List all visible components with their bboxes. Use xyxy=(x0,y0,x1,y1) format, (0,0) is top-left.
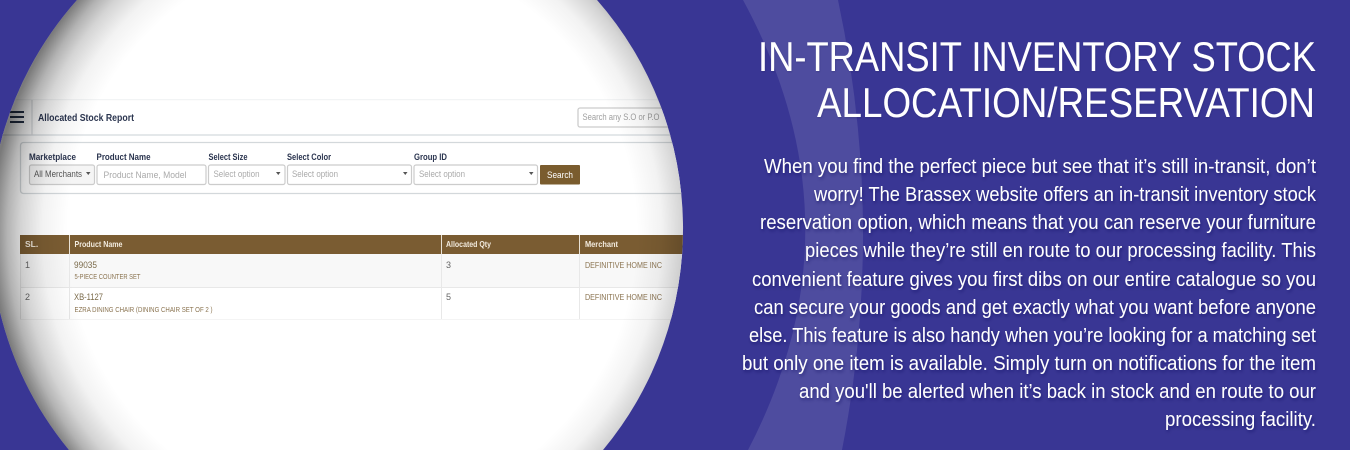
decorative crescent xyxy=(743,0,863,450)
table row 2 xyxy=(20,288,690,320)
field placeholders: Select option xyxy=(419,169,465,179)
field placeholders: Select option xyxy=(292,169,338,179)
table row 1: 5-PIECE COUNTER SET xyxy=(74,274,141,281)
filter labels: Group ID xyxy=(414,152,447,162)
body text: When you find the perfect piece but see that it’s still in-transit, don’t xyxy=(764,156,1316,178)
body text: and you'll be alerted when it’s back in stock and en route to our xyxy=(799,381,1316,403)
search box xyxy=(578,108,688,127)
table header: Merchant xyxy=(585,239,618,249)
icon: menu xyxy=(10,112,24,122)
field placeholders xyxy=(34,170,464,180)
filter panel xyxy=(20,142,700,194)
table row 1: DEFINITIVE HOME INC xyxy=(585,260,662,270)
report title: Allocated Stock Report xyxy=(38,112,134,124)
filter labels: Marketplace xyxy=(29,152,76,162)
lens vignette xyxy=(0,0,690,450)
table row 2: EZRA DINING CHAIR (DINING CHAIR SET OF 2 ) xyxy=(74,307,212,314)
field placeholders: Product Name, Model xyxy=(104,170,186,180)
body text: can secure your goods and get exactly what you want before anyone xyxy=(754,297,1316,319)
body text: worry! The Brassex website offers an in-transit inventory stock xyxy=(813,184,1317,206)
table header: Product Name xyxy=(74,239,123,249)
field placeholders: Select option xyxy=(214,169,260,179)
field placeholders: All Merchants xyxy=(34,169,82,179)
filter labels: Product Name xyxy=(96,152,150,162)
filter labels: Select Color xyxy=(287,152,331,162)
body text: reservation option, which means that you can reserve your furniture xyxy=(760,212,1316,234)
table header: SL. xyxy=(25,239,38,249)
screenshot lens xyxy=(0,0,700,450)
title xyxy=(758,33,1316,126)
body text: processing facility. xyxy=(1165,409,1316,431)
filter fields xyxy=(30,165,538,184)
table row 2: DEFINITIVE HOME INC xyxy=(585,292,662,302)
table row 1: 3 xyxy=(446,260,451,270)
table row 1: 1 xyxy=(25,260,30,270)
dropdown arrows xyxy=(86,172,534,175)
search button xyxy=(540,165,580,184)
report header bar xyxy=(0,100,690,135)
table row 2: 2 xyxy=(25,292,30,302)
body text: pieces while they’re still en route to our processing facility. This xyxy=(805,240,1316,262)
search box: Search any S.O or P.O xyxy=(582,112,660,122)
search button: Search xyxy=(547,170,573,181)
filter labels xyxy=(30,154,447,162)
filter labels: Select Size xyxy=(208,152,248,162)
table header: Allocated Qty xyxy=(446,239,491,249)
body text: convenient feature gives you first dibs on our entire catalogue so you xyxy=(752,269,1316,291)
table row 2: XB-1127 xyxy=(74,292,103,302)
table row 1: 99035 xyxy=(74,260,97,270)
table row 1 xyxy=(20,254,690,287)
table row 2: 5 xyxy=(446,292,451,302)
body text: but only one item is available. Simply turn on notifications for the item xyxy=(742,353,1316,375)
body text xyxy=(742,156,1317,431)
table header xyxy=(20,235,690,254)
results table xyxy=(20,235,690,320)
